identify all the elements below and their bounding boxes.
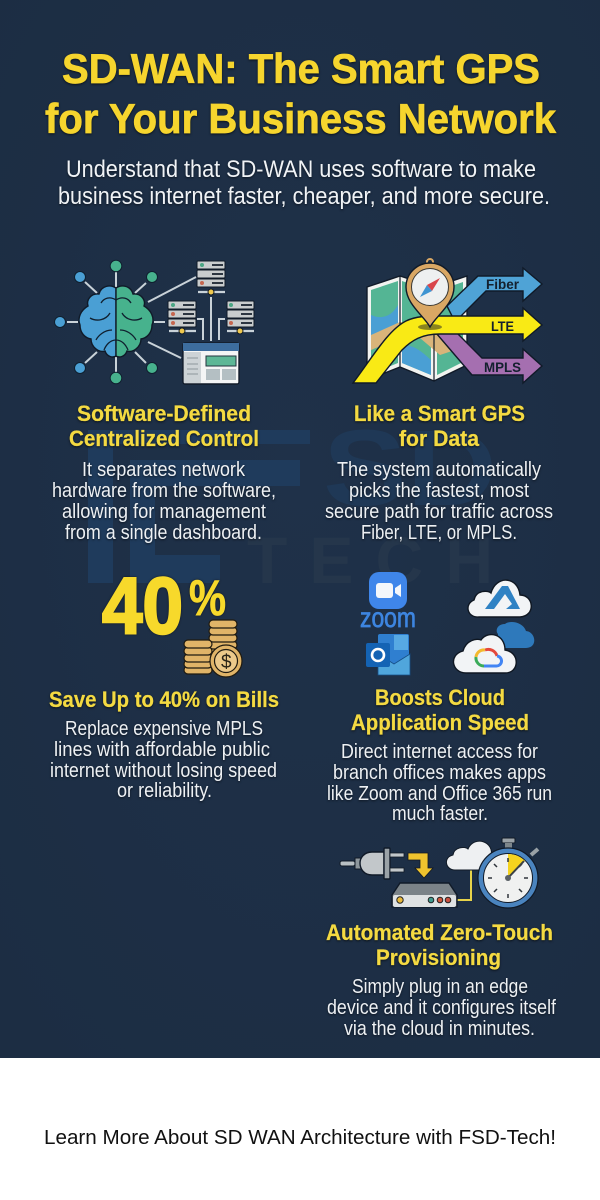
heading: Like a Smart GPS: [354, 401, 525, 426]
panel: like a smart gps: [325, 259, 553, 544]
heading: Application Speed: [351, 710, 529, 735]
description: internet without losing speed: [50, 760, 277, 782]
heading: [354, 401, 525, 451]
description: picks the fastest, most: [349, 480, 529, 502]
heading: [69, 401, 259, 451]
description: or reliability.: [117, 780, 212, 802]
panel: software-defined centralized control: [52, 260, 276, 544]
description: like Zoom and Office 365 run: [327, 783, 552, 805]
description: hardware from the software,: [52, 480, 276, 502]
icon: map, compass pin and route arrows: Fiber: [486, 276, 520, 292]
icon: cloud app logos: [360, 572, 534, 675]
description: [327, 976, 556, 1040]
description: Fiber, LTE, or MPLS.: [361, 522, 517, 544]
description: much faster.: [392, 803, 488, 825]
panel: save up to 40%: [49, 561, 279, 802]
description: lines with affordable public: [54, 739, 270, 761]
description: Simply plug in an edge: [352, 976, 528, 998]
icon: map, compass pin and route arrows: MPLS: [484, 359, 521, 375]
description: [50, 718, 277, 802]
heading: Centralized Control: [69, 426, 259, 451]
description: It separates network: [82, 459, 246, 481]
heading: Save Up to 40% on Bills: [49, 687, 279, 712]
title: [45, 45, 557, 142]
panel: boosts cloud application speed: [327, 572, 552, 825]
description: [52, 459, 276, 544]
icon: map, compass pin and route arrows: [353, 259, 542, 383]
description: via the cloud in minutes.: [344, 1018, 535, 1040]
subtitle: business internet faster, cheaper, and more secure.: [58, 183, 550, 210]
icon: plug, edge device, cloud and stopwatch: [340, 838, 538, 908]
description: from a single dashboard.: [65, 522, 262, 544]
title: SD-WAN: The Smart GPS: [62, 45, 540, 92]
icon: brain network with servers and dashboard: [54, 260, 254, 384]
subtitle: [58, 156, 550, 210]
heading: for Data: [399, 426, 480, 451]
description: allowing for management: [62, 501, 266, 523]
heading: Software-Defined: [77, 401, 251, 426]
icon: 40% with coins: 40: [102, 561, 183, 650]
description: Replace expensive MPLS: [65, 718, 263, 740]
description: branch offices makes apps: [333, 762, 546, 784]
heading: Automated Zero-Touch: [326, 920, 553, 945]
description: secure path for traffic across: [325, 501, 553, 523]
watermark: FSD TECH: TECH: [247, 523, 493, 597]
icon: 40% with coins: $: [221, 652, 232, 673]
icon: cloud app logos: zoom: [360, 602, 416, 633]
icon: map, compass pin and route arrows: LTE: [491, 318, 514, 334]
description: Direct internet access for: [341, 741, 538, 763]
heading: [351, 685, 529, 735]
description: The system automatically: [337, 459, 541, 481]
panel: automated zero-touch provisioning: [326, 838, 556, 1040]
heading: [326, 920, 553, 970]
heading: Provisioning: [376, 945, 501, 970]
description: [327, 741, 552, 825]
watermark: FSD TECH: SD: [323, 407, 497, 528]
watermark: FSD TECH: [88, 407, 497, 597]
description: device and it configures itself: [327, 997, 556, 1019]
heading: Boosts Cloud: [375, 685, 505, 710]
subtitle: Understand that SD-WAN uses software to make: [66, 156, 536, 183]
description: [325, 459, 553, 544]
title: for Your Business Network: [45, 95, 557, 142]
icon: 40% with coins: [102, 561, 242, 677]
icon: 40% with coins: %: [189, 570, 226, 626]
footer call to action: Learn More About SD WAN Architecture with FSD-Tech!: [44, 1127, 556, 1149]
